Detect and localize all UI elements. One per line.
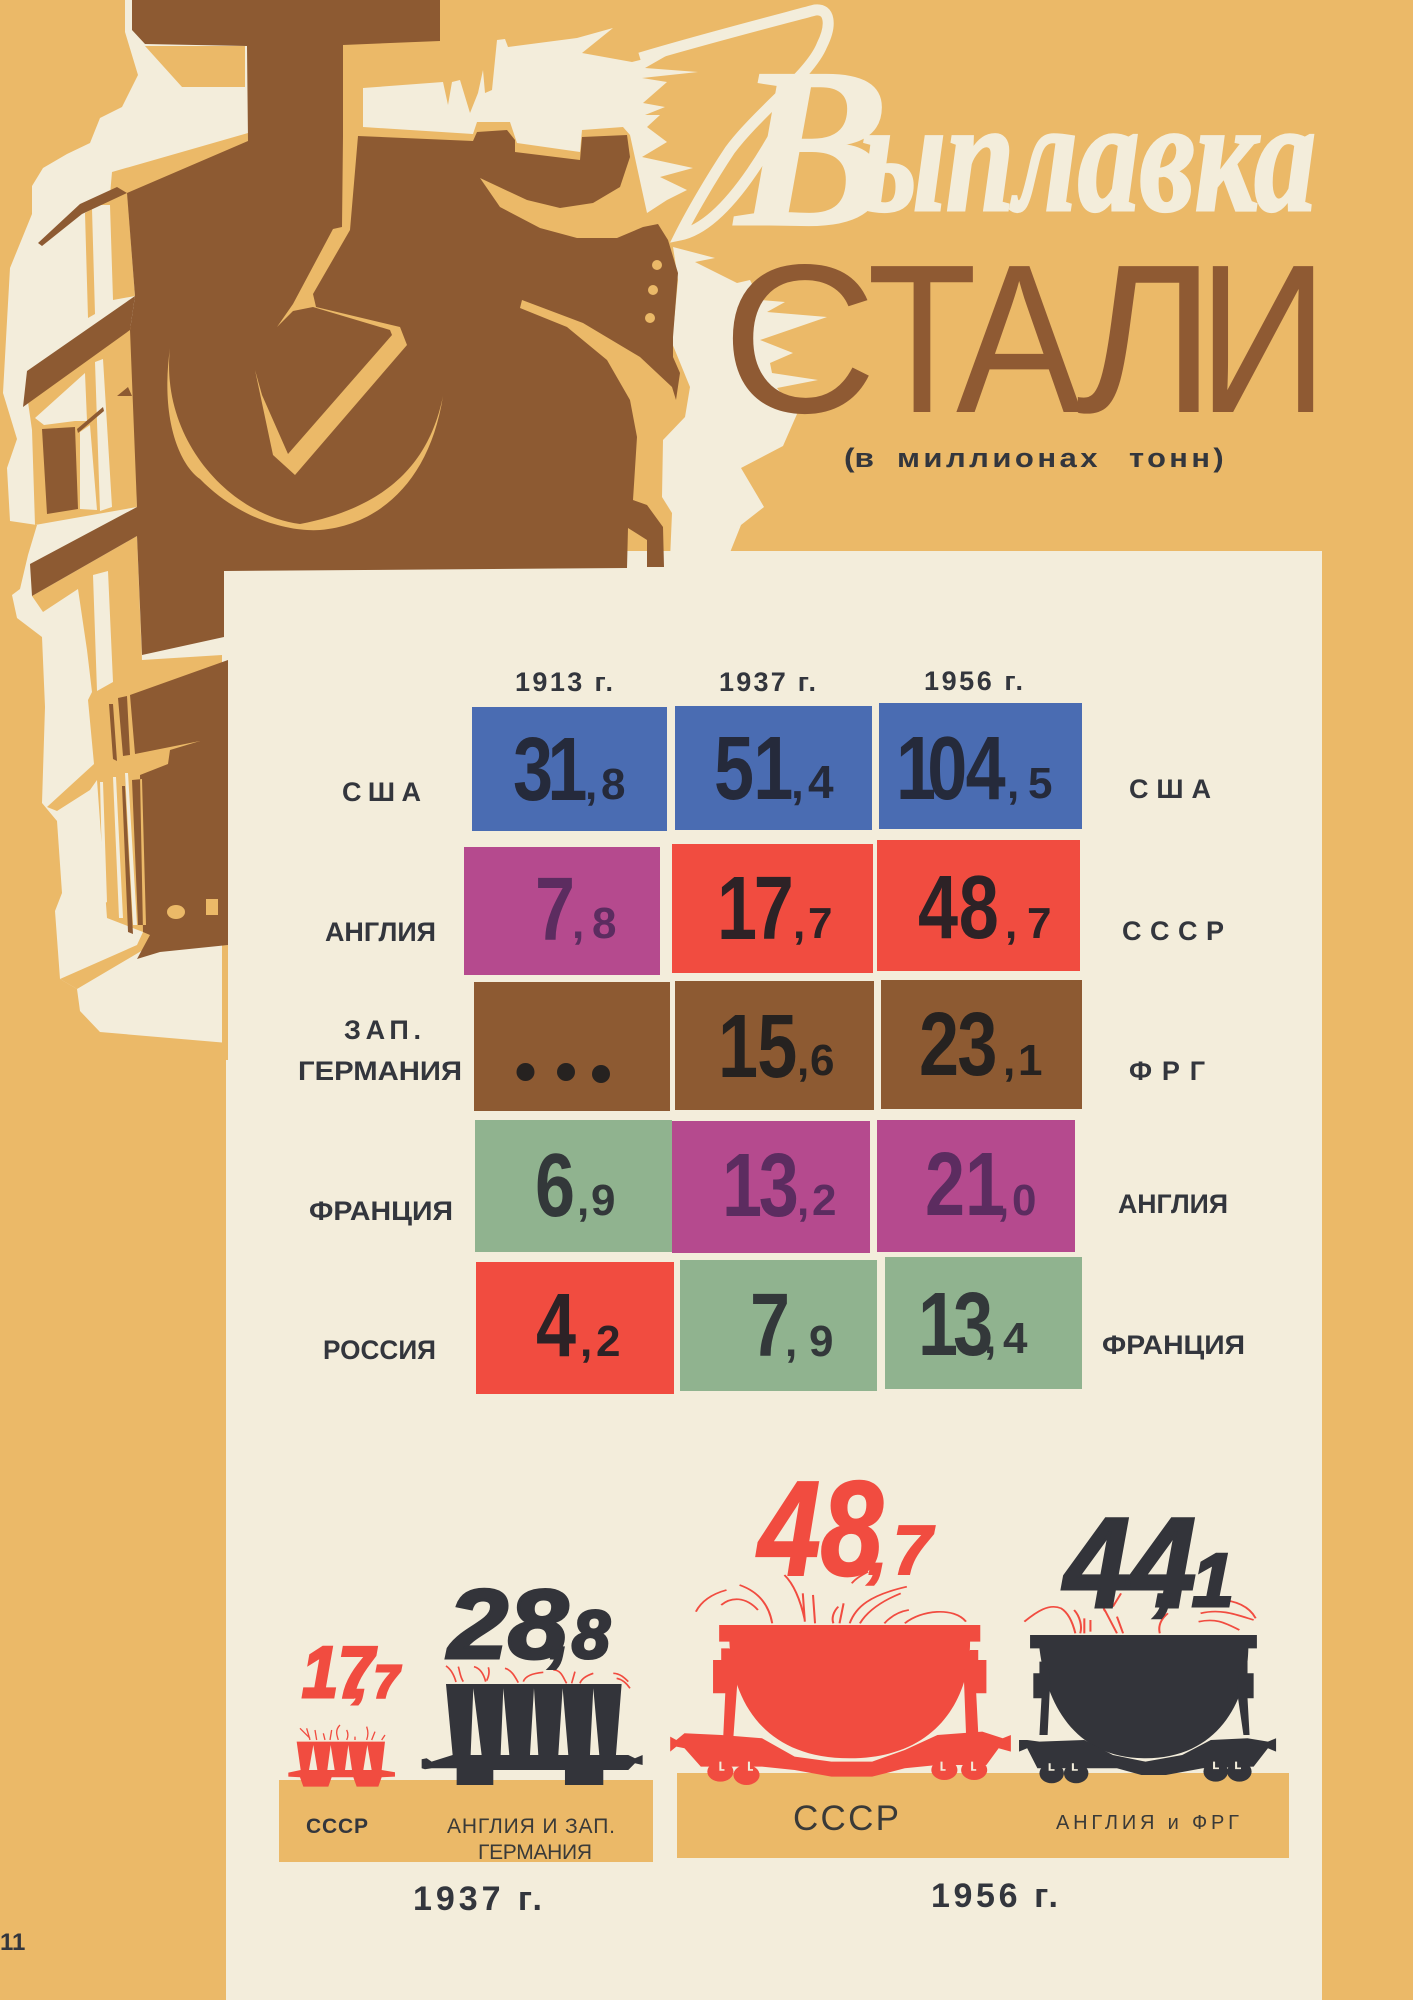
cell: France 1913	[475, 1120, 672, 1252]
cell: USSR 1956: 48	[918, 857, 999, 958]
cell: West Germany 1937: 15	[718, 996, 797, 1097]
cell: West Germany 1937: ,6	[797, 1036, 834, 1085]
cell: USSR 1956	[877, 840, 1080, 971]
ladle: USSR 1956	[670, 1572, 1011, 1785]
right row labels: АНГЛИЯ	[1118, 1189, 1228, 1219]
title: СТАЛИ	[722, 220, 1328, 457]
left row labels: ФРАНЦИЯ	[309, 1196, 453, 1226]
bar labels 1937: АНГЛИЯ И ЗАП.	[447, 1815, 615, 1838]
cell: England 1956: 21	[925, 1134, 1005, 1235]
right row labels: ФРАНЦИЯ	[1102, 1330, 1245, 1360]
cell: USA 1913: ,8	[585, 760, 625, 809]
subtitle: units: (в	[844, 443, 874, 473]
title swash	[640, 10, 828, 235]
cell: Russia 1913: ,2	[580, 1317, 620, 1366]
table year headers: 1956 г.	[924, 666, 1023, 696]
table year headers	[515, 666, 1023, 697]
left row labels: АНГЛИЯ	[325, 917, 436, 947]
title: СТАЛИ: А	[956, 220, 1082, 457]
right row labels: США	[1129, 774, 1211, 804]
cell: France 1956	[885, 1257, 1082, 1389]
left row labels: ЗАП.	[344, 1015, 421, 1045]
value: 28,8	[446, 1569, 610, 1679]
cell: USSR 1937: ,7	[793, 899, 832, 948]
cell: USA 1913	[472, 707, 667, 831]
cell: USSR 1956: ,7	[1005, 899, 1051, 948]
left row labels: РОССИЯ	[323, 1335, 436, 1365]
furnace rivets	[167, 260, 662, 919]
value: 17,7: ,7	[353, 1656, 401, 1707]
bar labels 1937	[306, 1815, 615, 1864]
bar labels 1937: ГЕРМАНИЯ	[478, 1841, 592, 1864]
right row labels: СССР	[1122, 916, 1224, 946]
bar labels 1956	[793, 1799, 1239, 1838]
value: 48,7: 48	[756, 1453, 883, 1604]
cell: England 1913: 7	[535, 859, 575, 960]
cell: USA 1913: 31	[513, 719, 587, 820]
furnace left wall: ochre shading	[27, 46, 248, 1060]
title: Выплавка: В	[732, 20, 890, 275]
wagon: England and West Germany 1937	[422, 1666, 643, 1785]
furnace highlight: lightning	[255, 136, 407, 475]
cell: USA 1937: ,4	[791, 756, 834, 808]
title: СТАЛИ: Л	[1076, 220, 1216, 457]
cell: USA 1956	[879, 703, 1082, 829]
value: 44,1: 44	[1061, 1492, 1196, 1635]
furnace lower section with stripes	[23, 187, 228, 959]
ground bar 1937	[279, 1780, 653, 1862]
cell: USA 1937	[675, 706, 872, 830]
cell: France 1937	[680, 1260, 877, 1391]
cell: England 1937: 13	[722, 1135, 799, 1236]
subtitle: units: миллионах	[897, 443, 1101, 473]
cell: France 1956: ,4	[984, 1314, 1028, 1363]
cell: USA 1956: ,5	[1007, 759, 1052, 808]
wagon: USSR 1937	[288, 1725, 395, 1787]
year: 1937: 1937 г.	[413, 1880, 542, 1918]
cell: FRG 1956: ,1	[1003, 1036, 1042, 1085]
cell: England 1913: ,8	[572, 899, 616, 948]
ground bar 1956	[677, 1773, 1289, 1858]
cell: Russia 1913	[476, 1262, 674, 1394]
cell: England 1937	[672, 1121, 870, 1253]
table year headers: 1937 г.	[719, 667, 816, 697]
cell: West Germany 1937	[675, 981, 874, 1110]
title: Выплавка	[640, 10, 1316, 275]
cell: France 1956: 13	[918, 1274, 993, 1375]
cell: USA 1937: 51	[714, 718, 793, 819]
cell: England 1956: ,0	[997, 1176, 1036, 1225]
cell: England 1937: ,2	[797, 1176, 836, 1225]
main cream panel	[226, 551, 1322, 2000]
right row labels: ФРГ	[1129, 1056, 1205, 1086]
bar labels 1956: АНГЛИЯ и ФРГ	[1056, 1812, 1239, 1834]
cell: USSR 1937: 17	[717, 858, 794, 959]
cell: France 1937: 7	[750, 1275, 790, 1376]
cell: USSR 1937	[672, 844, 873, 973]
cell: England 1956	[877, 1120, 1075, 1252]
title: СТАЛИ: С	[722, 220, 877, 457]
value: 17,7: 17	[302, 1633, 377, 1713]
year: 1956: 1956 г.	[931, 1877, 1058, 1915]
cell: West Germany 1913	[474, 982, 670, 1111]
table year headers: 1913 г.	[515, 667, 613, 697]
ladle: England and FRG 1956	[1019, 1593, 1276, 1783]
illustration: steel furnace	[23, 0, 680, 1060]
cell: Russia 1913: 4	[536, 1275, 576, 1376]
value: 28,8: 28	[446, 1569, 569, 1679]
right row labels	[1102, 774, 1245, 1360]
title: СТАЛИ: И	[1198, 220, 1328, 457]
cell: France 1937: ,9	[785, 1317, 833, 1366]
cell: England 1913	[464, 847, 660, 975]
furnace body	[127, 0, 680, 655]
furnace highlight: arc	[167, 348, 443, 530]
value: 28,8: ,8	[549, 1597, 610, 1673]
left row labels: ГЕРМАНИЯ	[298, 1056, 462, 1086]
subtitle: units: тонн)	[1129, 443, 1227, 473]
cell: FRG 1956: 23	[919, 994, 997, 1095]
cream splash behind furnace	[3, 0, 827, 1043]
cell: France 1913: 6	[535, 1135, 575, 1236]
value: 44,1: ,1	[1154, 1538, 1234, 1622]
left row labels	[298, 777, 462, 1365]
page number: 11	[0, 1929, 25, 1956]
bar labels 1937: СССР	[306, 1815, 368, 1838]
furnace left wall: cream window slits	[35, 359, 137, 925]
table of values	[464, 703, 1082, 1394]
bar labels 1956: СССР	[793, 1799, 899, 1838]
value: 48,7: ,7	[867, 1511, 935, 1589]
cell: USA 1956: 104	[896, 718, 1006, 819]
subtitle: units	[844, 443, 1227, 473]
left row labels: США	[342, 777, 421, 807]
title: СТАЛИ: Т	[867, 220, 977, 457]
cell: France 1913: ,9	[577, 1176, 615, 1225]
cell: FRG 1956	[881, 980, 1082, 1109]
